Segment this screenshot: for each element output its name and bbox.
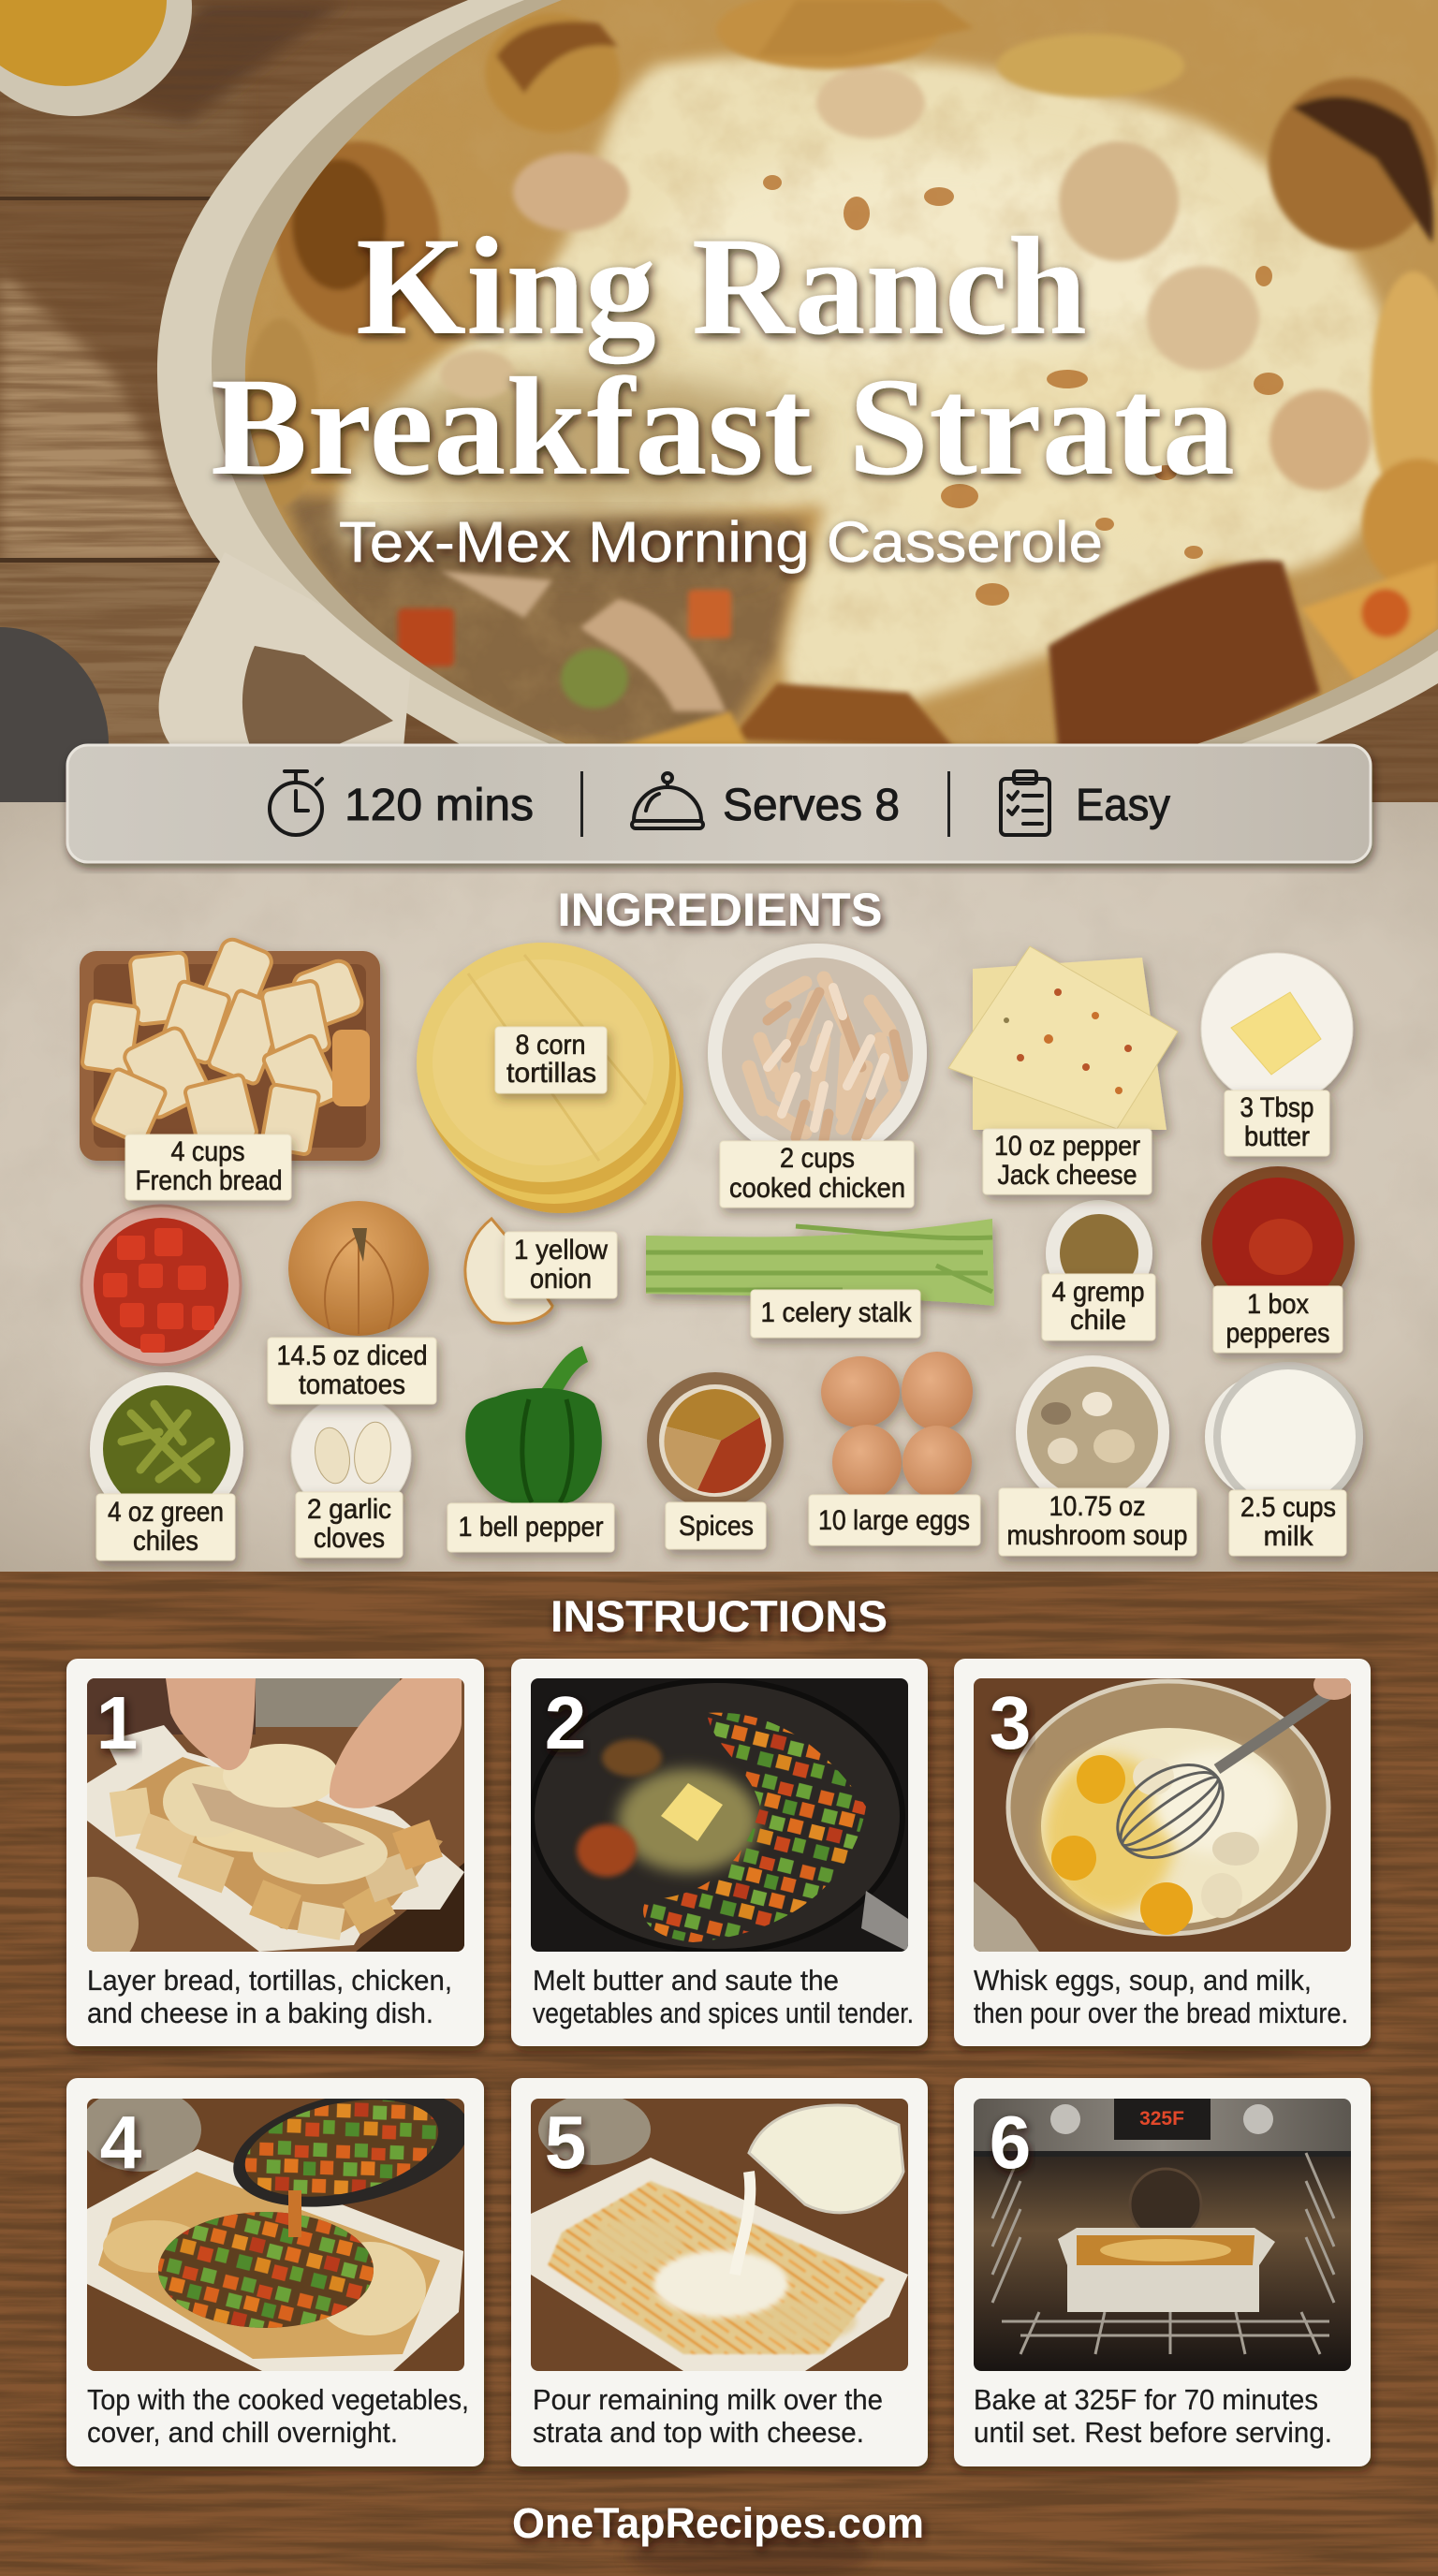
dish <box>87 1725 464 1952</box>
juice glass <box>0 0 192 116</box>
ingredient: glass of milk <box>1205 1362 1363 1512</box>
ingredient: mushroom soup bowl <box>1016 1355 1169 1509</box>
step 4 caption: cover, and chill overnight. <box>87 2416 398 2449</box>
label: garlic cloves <box>296 1492 403 1558</box>
label: pepper Jack cheese: Jack cheese <box>998 1160 1137 1191</box>
step 1 card <box>49 1659 484 2046</box>
ingredient: green bell pepper <box>465 1346 602 1504</box>
label: gremp chile: 4 gremp <box>1052 1277 1144 1308</box>
label: milk <box>1229 1490 1346 1556</box>
ingredient: butter on plate <box>1201 953 1353 1105</box>
melted cheese <box>337 54 1404 730</box>
ingredient: spice mix bowl <box>647 1372 784 1509</box>
bread crust chunks <box>243 0 1438 749</box>
step 6 photo: 325F <box>1139 2108 1184 2130</box>
step 2 caption <box>533 1964 914 2029</box>
label: large eggs <box>809 1495 980 1545</box>
ingredient: yellow onion <box>288 1201 429 1336</box>
label: spices <box>666 1502 766 1549</box>
ingredient illustrations <box>80 936 1363 1526</box>
label: mushroom soup: 10.75 oz <box>1049 1491 1146 1522</box>
step 6 caption: until set. Rest before serving. <box>974 2416 1332 2449</box>
footer website: OneTapRecipes.com <box>512 2499 924 2547</box>
label: garlic cloves: 2 garlic <box>307 1494 391 1525</box>
icon: stopwatch <box>270 771 322 835</box>
step 3 photo <box>974 1670 1355 1952</box>
step number 5: 5 <box>545 2100 586 2184</box>
label: cooked chicken: 2 cups <box>780 1143 855 1174</box>
baking dish <box>157 0 1438 805</box>
label: butter: butter <box>1244 1121 1310 1152</box>
vegetables <box>398 608 454 666</box>
label: gremp chile: chile <box>1070 1305 1126 1336</box>
bar panel <box>67 745 1371 862</box>
title line 2: Breakfast Strata <box>211 349 1235 505</box>
instructions heading: INSTRUCTIONS <box>550 1591 888 1641</box>
label: yellow onion: onion <box>530 1264 592 1295</box>
step 5 caption <box>533 2383 883 2449</box>
step 4 photo <box>80 2071 479 2371</box>
step 4 caption <box>87 2383 469 2449</box>
label: butter: 3 Tbsp <box>1240 1092 1314 1123</box>
step 4 caption: Top with the cooked vegetables, <box>87 2383 469 2416</box>
subtitle: Tex-Mex Morning Casserole <box>339 510 1103 574</box>
step 3 caption: Whisk eggs, soup, and milk, <box>974 1964 1312 1997</box>
servings: Serves 8 <box>723 781 900 830</box>
label: milk: milk <box>1264 1521 1313 1552</box>
label: pepperes <box>1213 1286 1343 1353</box>
card background <box>954 1659 1371 2046</box>
label: corn tortillas <box>495 1027 607 1093</box>
scooped interior <box>281 496 805 758</box>
label: milk: 2.5 cups <box>1240 1492 1336 1523</box>
label: diced tomatoes: 14.5 oz diced <box>277 1340 427 1371</box>
label: garlic cloves: cloves <box>314 1523 385 1554</box>
label: bell pepper <box>448 1503 614 1552</box>
label: mushroom soup: mushroom soup <box>1007 1520 1187 1551</box>
label: French bread: 4 cups <box>170 1136 245 1167</box>
step 6 caption <box>974 2383 1332 2449</box>
label: French bread: French bread <box>135 1165 283 1196</box>
ingredient: corn tortillas <box>417 943 683 1213</box>
step 1 caption: and cheese in a baking dish. <box>87 1997 433 2029</box>
divider 2 <box>947 771 950 837</box>
step 5 photo <box>531 2094 908 2371</box>
label: corn tortillas: tortillas <box>506 1058 596 1089</box>
title line 1: King Ranch <box>356 209 1087 364</box>
label: gremp chile <box>1042 1274 1155 1340</box>
hero photo: baked strata in dish on wooden table <box>0 0 1438 861</box>
step 4 card <box>66 2071 484 2466</box>
step number 2: 2 <box>545 1681 586 1764</box>
step 3 caption: then pour over the bread mixture. <box>974 1997 1348 2029</box>
step 1 caption <box>87 1964 452 2029</box>
label: celery <box>751 1290 920 1338</box>
step 1 photo <box>49 1678 464 1970</box>
ingredient: eggs <box>821 1352 973 1500</box>
label: pepper Jack cheese <box>983 1129 1152 1194</box>
label: large eggs: 10 large eggs <box>818 1505 970 1536</box>
step 6 card <box>954 2078 1371 2466</box>
step 3 card <box>954 1659 1371 2046</box>
label: cooked chicken <box>720 1141 914 1208</box>
step number 6: 6 <box>990 2100 1031 2184</box>
label: yellow onion <box>505 1232 617 1298</box>
card background <box>66 2078 484 2466</box>
difficulty: Easy <box>1076 781 1170 830</box>
ingredient: ground spice bowl <box>1046 1200 1152 1307</box>
casserole food <box>243 0 1438 758</box>
browned spots <box>763 175 1284 606</box>
label: pepperes: pepperes <box>1226 1318 1329 1349</box>
label: corn tortillas: 8 corn <box>515 1030 586 1061</box>
label: diced tomatoes <box>268 1338 436 1404</box>
label: mushroom soup <box>999 1488 1196 1556</box>
label: pepper Jack cheese: 10 oz pepper <box>994 1131 1140 1162</box>
label: celery: 1 celery stalk <box>760 1297 912 1328</box>
ingredients heading: INGREDIENTS <box>558 884 882 936</box>
step 2 photo <box>531 1678 908 1952</box>
step 2 caption: vegetables and spices until tender. <box>533 1997 914 2029</box>
stone ingredients background <box>0 802 1438 1573</box>
label: cooked chicken: cooked chicken <box>729 1173 905 1204</box>
icon: cloche <box>632 773 703 828</box>
ingredient: garlic cloves <box>291 1396 411 1515</box>
title <box>211 209 1235 505</box>
step 3 caption <box>974 1964 1348 2029</box>
ingredient: green chiles bowl <box>90 1372 243 1526</box>
card background <box>954 2078 1371 2466</box>
step number 1: 1 <box>96 1681 138 1764</box>
ingredient: celery stalks <box>646 1219 994 1306</box>
label: French bread <box>125 1134 291 1200</box>
label: pepperes: 1 box <box>1247 1289 1309 1320</box>
step number 4: 4 <box>100 2100 142 2184</box>
step 6 caption: Bake at 325F for 70 minutes <box>974 2383 1318 2416</box>
recipe meta bar <box>67 745 1371 862</box>
step number 3: 3 <box>990 1681 1031 1764</box>
hands <box>166 1678 256 1770</box>
wooden instructions background <box>0 1572 1438 2576</box>
label: bell pepper: 1 bell pepper <box>459 1512 604 1543</box>
step 5 caption: strata and top with cheese. <box>533 2416 864 2449</box>
step 5 card <box>511 2078 928 2466</box>
tortillas and chicken <box>253 1822 388 1884</box>
card background <box>511 2078 928 2466</box>
wooden table <box>0 0 1438 805</box>
label: diced tomatoes: tomatoes <box>299 1369 405 1400</box>
wooden bowl <box>49 1877 139 1970</box>
step 2 caption: Melt butter and saute the <box>533 1964 839 1997</box>
label: yellow onion: 1 yellow <box>514 1235 608 1266</box>
ingredient labels <box>96 1027 1346 1560</box>
step 5 caption: Pour remaining milk over the <box>533 2383 883 2416</box>
step 2 card <box>511 1659 928 2046</box>
serving spoon <box>0 627 109 802</box>
step 6 photo <box>974 2099 1351 2371</box>
step 1 caption: Layer bread, tortillas, chicken, <box>87 1964 452 1997</box>
label: spices: Spices <box>679 1511 754 1542</box>
icon: clipboard checklist <box>1001 771 1049 835</box>
ingredient: French bread on board <box>80 936 380 1161</box>
ingredient: pepper Jack cheese slices <box>948 946 1178 1130</box>
divider 1 <box>580 771 583 837</box>
ingredient: shredded chicken bowl <box>708 944 927 1163</box>
label: green chiles: 4 oz green <box>108 1497 224 1528</box>
cook time: 120 mins <box>345 781 534 830</box>
card background <box>511 1659 928 2046</box>
ingredient: red sauce bowl <box>1201 1166 1355 1320</box>
ingredient: diced tomatoes <box>81 1206 241 1365</box>
card background <box>66 1659 484 2046</box>
label: butter <box>1225 1090 1329 1156</box>
label: green chiles <box>96 1494 235 1560</box>
ingredient: onion half <box>465 1219 552 1324</box>
label: green chiles: chiles <box>133 1526 198 1557</box>
chicken shreds <box>513 153 629 231</box>
